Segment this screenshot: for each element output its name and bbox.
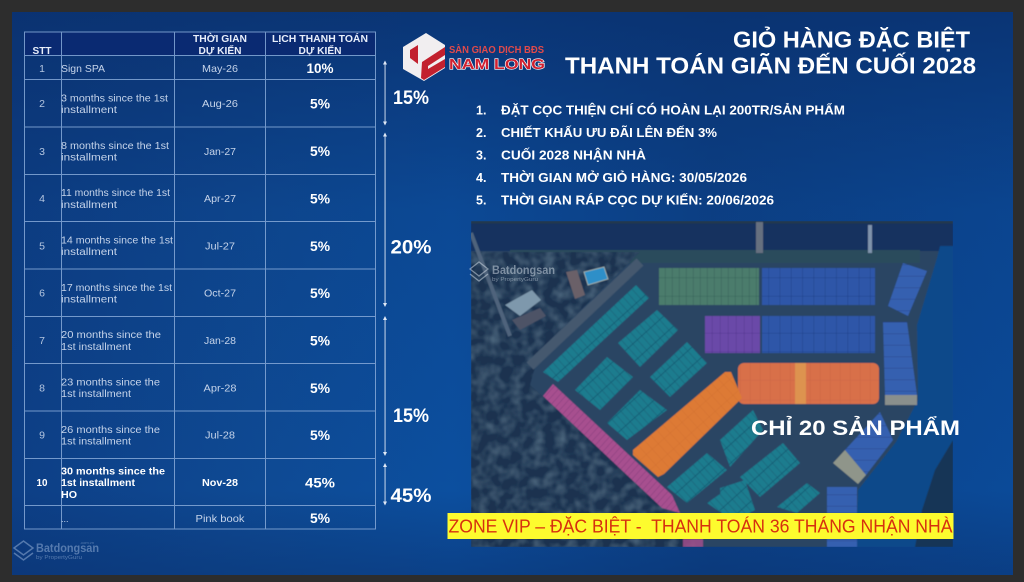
title: GIỎ HÀNG ĐẶC BIỆT [733,24,970,52]
row 5 [39,234,331,258]
row 3 [39,140,331,164]
row 4: installment [61,199,117,211]
row 9: 26 months since the [61,424,160,436]
table headings: DỰ KIẾN [298,44,342,57]
benefits list: 4. [476,171,486,185]
row 6: 17 months since the 1st [61,282,172,294]
row 2: installment [61,104,117,116]
watermark: bottom left: .com.vn [80,540,94,545]
teal blocks [543,285,649,382]
logo: Nam Long: NAM LONG [449,56,545,73]
logo hexagon mark [403,33,445,81]
row 4: 5% [310,190,331,206]
row 5: Jul-27 [205,240,235,252]
row 8: Apr-28 [204,382,237,394]
blue block bottom [827,487,857,513]
row 3: Jan-27 [204,146,236,158]
table headings [32,32,368,57]
arrow: 45 percent group [383,463,387,506]
row 1: 1 [39,63,45,75]
tree area texture [471,252,678,547]
row 8: 1st installment [61,388,131,400]
benefits list: CHIẾT KHẤU ƯU ĐÃI LÊN ĐẾN 3% [501,125,717,140]
row 10: HO [61,489,77,501]
row 4: 11 months since the 1st [61,187,170,199]
beige plot [833,450,866,484]
row 2 [39,92,331,116]
row 7: 5% [310,332,331,348]
row 6: installment [61,294,117,306]
orange block diagonal [633,372,742,477]
row 6: Oct-27 [204,288,236,300]
row 6 [39,282,331,306]
row 8: 23 months since the [61,376,160,388]
row 2: 2 [39,98,45,110]
table headings: THỜI GIAN [193,32,247,45]
arrow: 20 percent group [383,132,387,307]
product count label: CHỈ 20 SẢN PHẨM [751,415,960,440]
pool [584,267,608,285]
benefits list: CUỐI 2028 NHẬN NHÀ [501,148,646,162]
row 9: 5% [310,427,331,443]
row 7: 1st installment [61,341,131,353]
row 7: 7 [39,335,45,347]
courtyard [505,290,541,316]
tree area [471,252,700,547]
row 1: 10% [306,60,334,76]
row 10 [36,466,336,501]
row 1: Sign SPA [61,63,105,75]
row 9: 1st installment [61,436,131,448]
row 3: 3 [39,146,45,158]
blue block lower [762,316,875,353]
row 4: Apr-27 [204,193,236,205]
table grid [24,32,376,529]
clubhouse [566,270,585,299]
benefits list: 3. [476,148,486,162]
benefits list: THỜI GIAN MỞ GIỎ HÀNG: 30/05/2026 [501,170,747,185]
row 9 [39,424,331,448]
row 4: 4 [39,193,45,205]
blue block lower right [845,412,893,475]
logo: Nam Long [403,33,545,81]
row 3: installment [61,152,117,164]
row 10: 30 months since the [61,466,165,478]
purple block [705,316,760,353]
map land base [471,221,953,547]
row 8 [39,376,331,400]
right water [856,246,953,547]
row 11: ... [61,514,69,524]
right shore trees [915,440,953,547]
row 10: Nov-28 [202,477,238,489]
benefits list: 1. [476,104,486,118]
pier left [756,222,763,253]
instalment grouping arrows [383,60,432,507]
site map [470,221,960,547]
blue block upper [762,268,875,305]
logo text: SÀN GIAO DỊCH BĐS [449,43,544,56]
row 1: May-26 [202,63,238,75]
yellow VIP banner: ZONE VIP – ĐẶC BIỆT - THANH TOÁN 36 THÁNG NHẬN NHÀ [448,516,953,536]
row 10: 45% [305,474,336,490]
map watermark: by PropertyGuru [492,277,538,283]
benefits list: THỜI GIAN RÁP CỌC DỰ KIẾN: 20/06/2026 [501,192,774,208]
row 2: Aug-26 [202,98,238,110]
row 2: 3 months since the 1st [61,92,168,104]
row 3: 8 months since the 1st [61,140,169,152]
label: 15 percent: 15% [393,88,429,109]
row 5: 14 months since the 1st [61,234,173,246]
row 6: 6 [39,288,45,300]
row 7 [39,329,331,353]
payment schedule table [24,32,376,529]
benefits list: 5. [476,194,486,208]
row 9: 9 [39,430,45,442]
row 3: 5% [310,143,331,159]
benefits list [476,102,845,208]
arrow: 15 percent first group [383,60,387,126]
row 10: 1st installment [61,477,135,489]
arrow: 15 percent second group [383,316,387,456]
pink strip [543,384,680,513]
watermark: bottom left: by PropertyGuru [36,555,82,561]
row 8: 5% [310,380,331,396]
orange block horizontal [738,363,879,404]
table header band [24,32,375,55]
shoreline tree strip [510,250,920,263]
table headings: LỊCH THANH TOÁN [272,32,368,45]
title: THANH TOÁN GIÃN ĐẾN CUỐI 2028 [565,52,976,78]
row 5: 5% [310,238,331,254]
row 7: 20 months since the [61,329,161,341]
row 11: Pink book [196,513,245,525]
blue block upper right [888,263,927,316]
row 2: 5% [310,96,331,112]
map watermark [470,262,555,283]
label: 15 percent second: 15% [393,406,429,427]
table headings: STT [32,45,52,57]
row 9: Jul-28 [205,430,235,442]
row 6: 5% [310,285,331,301]
row 5: 5 [39,240,45,252]
row 1 [39,60,334,76]
row 11: 5% [310,510,331,526]
pier right [868,225,872,253]
watermark: bottom left: Batdongsan [36,543,99,555]
main diagonal road [530,262,640,366]
row 8: 8 [39,382,45,394]
row 4 [39,187,331,211]
benefits list: ĐẶT CỌC THIỆN CHÍ CÓ HOÀN LẠI 200TR/SẢN PHẨM [501,102,845,118]
left road [471,233,510,336]
row 5: installment [61,246,117,258]
row 10: 10 [36,477,48,489]
map watermark: Batdongsan [492,265,555,277]
label: 45 percent: 45% [390,486,432,507]
top sea [471,222,953,251]
green blocks [659,268,759,305]
benefits list: 2. [476,126,486,140]
row 7: Jan-28 [204,335,236,347]
label: 20 percent: 20% [390,238,432,258]
blue block right column [883,322,917,395]
title [565,24,976,78]
row 11 [61,510,331,526]
watermark: bottom left [14,540,99,561]
table headings: DỰ KIẾN [198,44,242,57]
